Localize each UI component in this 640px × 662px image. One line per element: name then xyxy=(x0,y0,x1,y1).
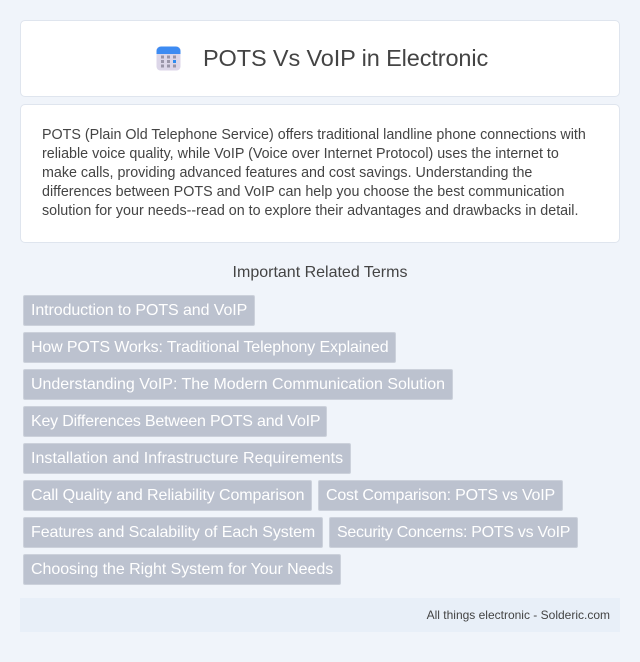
tag: Understanding VoIP: The Modern Communication Solution xyxy=(31,376,445,393)
tag xyxy=(23,480,312,511)
panel: header xyxy=(20,20,620,97)
tag xyxy=(23,406,327,437)
tag xyxy=(23,443,351,474)
heading: related terms: Important Related Terms xyxy=(233,264,407,281)
tag xyxy=(23,369,453,400)
footer: All things electronic - Solderic.com xyxy=(427,608,610,622)
tag xyxy=(23,295,255,326)
footer xyxy=(20,598,620,632)
icon: calendar xyxy=(156,46,180,70)
tag: Key Differences Between POTS and VoIP xyxy=(31,413,320,430)
tag: Cost Comparison: POTS vs VoIP xyxy=(326,487,555,504)
tag: Call Quality and Reliability Comparison xyxy=(31,487,304,504)
tag xyxy=(23,332,396,363)
title: POTS Vs VoIP in Electronic xyxy=(203,45,488,71)
tag xyxy=(23,554,341,585)
tag: Installation and Infrastructure Requirements xyxy=(31,450,343,467)
text line 1: POTS (Plain Old Telephone Service) offers traditional landline phone connections with xyxy=(42,127,586,143)
panel: intro text xyxy=(20,104,620,243)
text line 2: reliable voice quality, while VoIP (Voice over Internet Protocol) uses the internet to xyxy=(42,146,559,162)
tag xyxy=(318,480,563,511)
tag: How POTS Works: Traditional Telephony Explained xyxy=(31,339,388,356)
tag: Features and Scalability of Each System xyxy=(31,524,315,541)
text line 4: differences between POTS and VoIP can help you choose the best communication xyxy=(42,184,564,200)
tag: Security Concerns: POTS vs VoIP xyxy=(337,524,570,541)
tag xyxy=(23,517,323,548)
tag: Introduction to POTS and VoIP xyxy=(31,302,247,319)
tag xyxy=(329,517,578,548)
text line 3: make calls, providing advanced features and cost savings. Understanding the xyxy=(42,165,532,181)
tag: Choosing the Right System for Your Needs xyxy=(31,561,333,578)
text line 5: solution for your needs--read on to explore their advantages and drawbacks in detail. xyxy=(42,203,578,219)
